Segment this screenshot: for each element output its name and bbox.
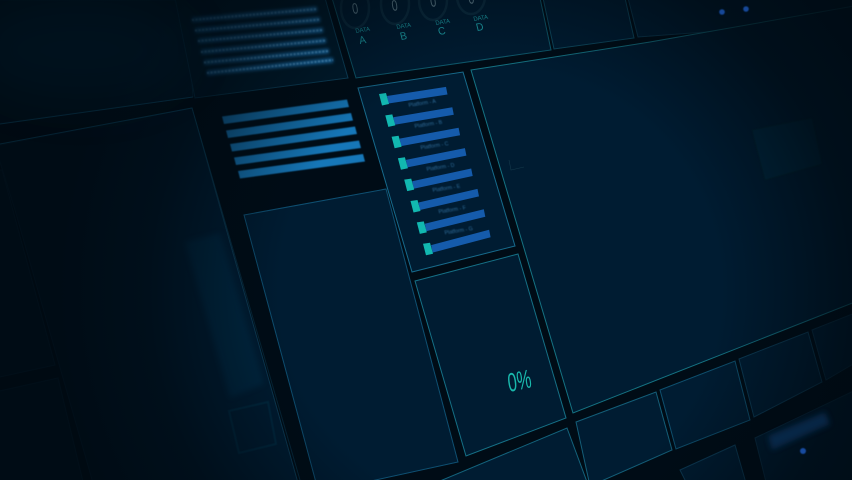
platform row H — [423, 230, 491, 255]
panel: blank tall left — [244, 189, 458, 480]
platform row B — [385, 107, 454, 130]
indicator dot top one — [719, 9, 725, 15]
platform row B: Platform - B — [414, 120, 443, 130]
platform row E: Platform - E — [432, 184, 461, 194]
left panel top edge — [0, 97, 300, 480]
panel: far left upper — [0, 170, 55, 378]
lower right blurred strip — [768, 412, 830, 450]
panel: dials — [332, 0, 551, 78]
panel: left large — [0, 108, 300, 480]
dial D: DATA — [473, 15, 489, 23]
panel: top strip 3 — [628, 0, 852, 37]
dial C — [419, 0, 451, 38]
panel: top left — [0, 0, 193, 124]
platform row C: Platform - C — [420, 141, 449, 152]
row glow — [192, 9, 333, 73]
panel: top data list — [175, 0, 348, 98]
platforms list — [379, 87, 491, 255]
row dots — [192, 9, 333, 73]
panel: main display — [471, 5, 852, 413]
dial D — [457, 0, 489, 34]
dial A: DATA — [355, 27, 371, 35]
blue list bars — [222, 100, 365, 178]
dial B: DATA — [396, 23, 412, 31]
dial gauges — [341, 0, 489, 47]
indicator dot top two — [743, 6, 749, 12]
panel: top strip 2 — [543, 0, 634, 49]
panel: platforms — [358, 72, 515, 272]
platform row C — [392, 128, 460, 152]
panel: bottom tile 4 — [812, 311, 852, 380]
panel: bottom tile 3 — [739, 332, 822, 417]
platform row E — [404, 168, 473, 194]
dial A — [341, 0, 371, 47]
platform row D — [398, 148, 466, 173]
data list rows — [192, 9, 333, 73]
panel: bottom tile 1 — [576, 392, 672, 480]
faint right block — [752, 118, 822, 180]
panel: bottom centre — [428, 428, 590, 480]
panel: lower right 2 — [755, 388, 852, 480]
panel: bottom tile 2 — [660, 361, 750, 449]
platform row A: Platform - A — [408, 99, 437, 109]
platform row D: Platform - D — [426, 163, 455, 173]
dial C: DATA — [435, 19, 451, 27]
faint left column — [185, 233, 264, 398]
platform row A — [379, 87, 448, 109]
dial C: C — [437, 26, 447, 38]
panel: far left lower — [0, 378, 85, 480]
platform row F — [410, 189, 479, 216]
panel: lower right 1 — [680, 445, 748, 480]
top left ambient glow — [0, 0, 190, 100]
dial B — [381, 0, 412, 43]
panel: percentage — [415, 254, 566, 456]
dial A: A — [358, 35, 367, 47]
dial B: B — [399, 31, 408, 43]
lower right dot — [800, 448, 806, 454]
platform row F: Platform - F — [438, 205, 467, 216]
faint left square — [229, 402, 276, 453]
percentage value: 0% — [506, 363, 533, 398]
dial D: D — [475, 22, 485, 34]
crosshair — [509, 160, 524, 170]
platform row G: Platform - G — [444, 226, 474, 237]
platform row G — [417, 209, 485, 237]
